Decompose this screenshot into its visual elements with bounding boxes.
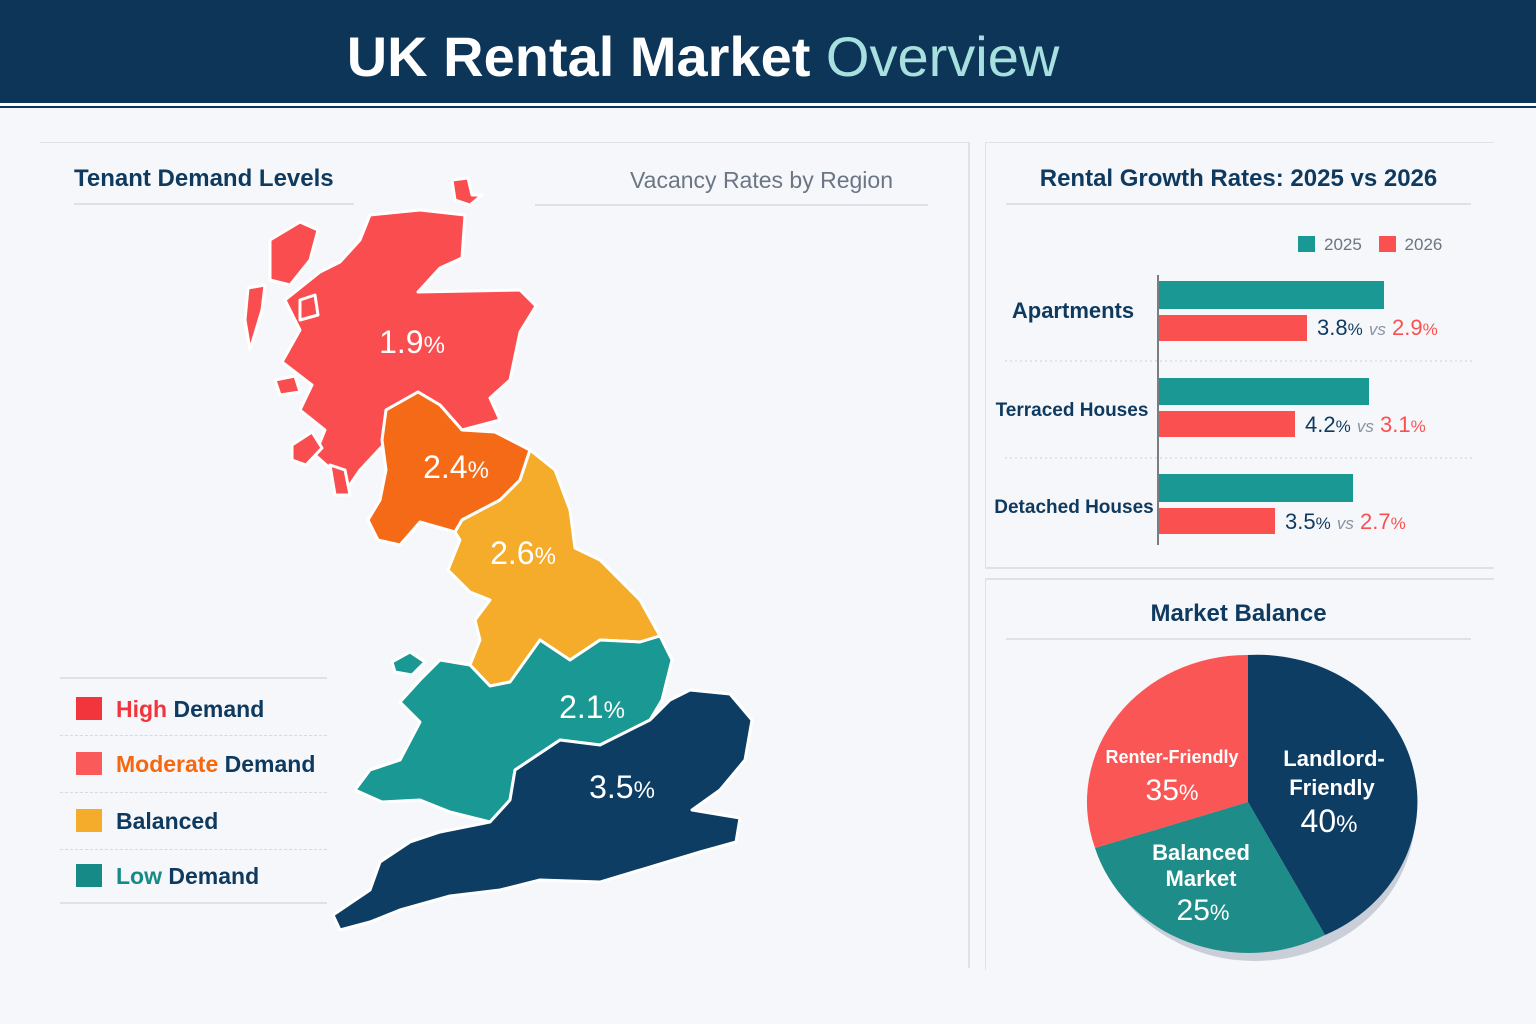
map labels: 3.5% [589,769,655,805]
label: landlord-friendly: Landlord- [1283,746,1385,771]
pie chart [1086,654,1418,961]
map labels: 1.9% [379,324,445,360]
panel: market balance [985,578,1494,970]
bars: apartments [1012,281,1438,341]
map labels: 2.6% [490,535,556,571]
heading: rental growth: Rental Growth Rates: 2025 vs 2026 [1040,165,1437,192]
label: balanced [1152,840,1250,927]
legend [60,677,327,904]
bars: detached: Detached Houses [994,497,1154,518]
legend: High Demand [116,696,264,722]
label: renter-friendly: Renter-Friendly [1105,747,1239,767]
title: UK Rental Market Overview [347,25,1059,88]
bar chart [994,275,1472,545]
legend: Low Demand [116,863,259,889]
map labels: 2.1% [559,689,625,725]
label: landlord-friendly [1283,746,1385,839]
bars: detached: 3.5% vs 2.7% [1285,509,1406,534]
chart legend: 2025 2026 [1324,235,1442,254]
panel: rental growth [985,142,1494,569]
legend: Moderate Demand [116,751,315,777]
label: renter-friendly: 35% [1146,774,1198,807]
region: Yorkshire/Midlands yellow [448,450,660,686]
legend: Balanced [116,808,218,834]
label: landlord-friendly: Friendly [1289,775,1376,800]
heading: market balance [1006,600,1471,640]
region: North England orange [368,392,530,545]
heading: market balance: Market Balance [1150,600,1327,627]
region: South England navy [333,690,752,930]
heading: tenant demand: Tenant Demand Levels [74,165,334,192]
panel: map [40,142,970,968]
bars: detached [994,474,1406,534]
bars: apartments: 3.8% vs 2.9% [1317,315,1438,340]
label: landlord-friendly: 40% [1301,803,1357,839]
bars: terraced: Terraced Houses [996,400,1148,421]
map labels [379,324,655,805]
label: balanced: 25% [1177,894,1229,927]
label: balanced: Market [1166,866,1237,891]
bars: terraced [996,378,1426,437]
map labels: 2.4% [423,449,489,485]
heading: vacancy rates: Vacancy Rates by Region [630,167,893,193]
header banner [0,0,1536,106]
label: balanced: Balanced [1152,840,1250,865]
label: renter-friendly [1105,747,1239,807]
heading: rental growth [1006,165,1471,205]
heading: tenant demand [74,165,354,205]
region: Scotland [245,178,536,495]
bars: apartments: Apartments [1012,298,1134,323]
heading: vacancy rates [535,167,928,206]
map of UK [244,176,754,932]
region: Wales & Midlands teal [355,636,672,822]
bars: terraced: 4.2% vs 3.1% [1305,412,1426,437]
